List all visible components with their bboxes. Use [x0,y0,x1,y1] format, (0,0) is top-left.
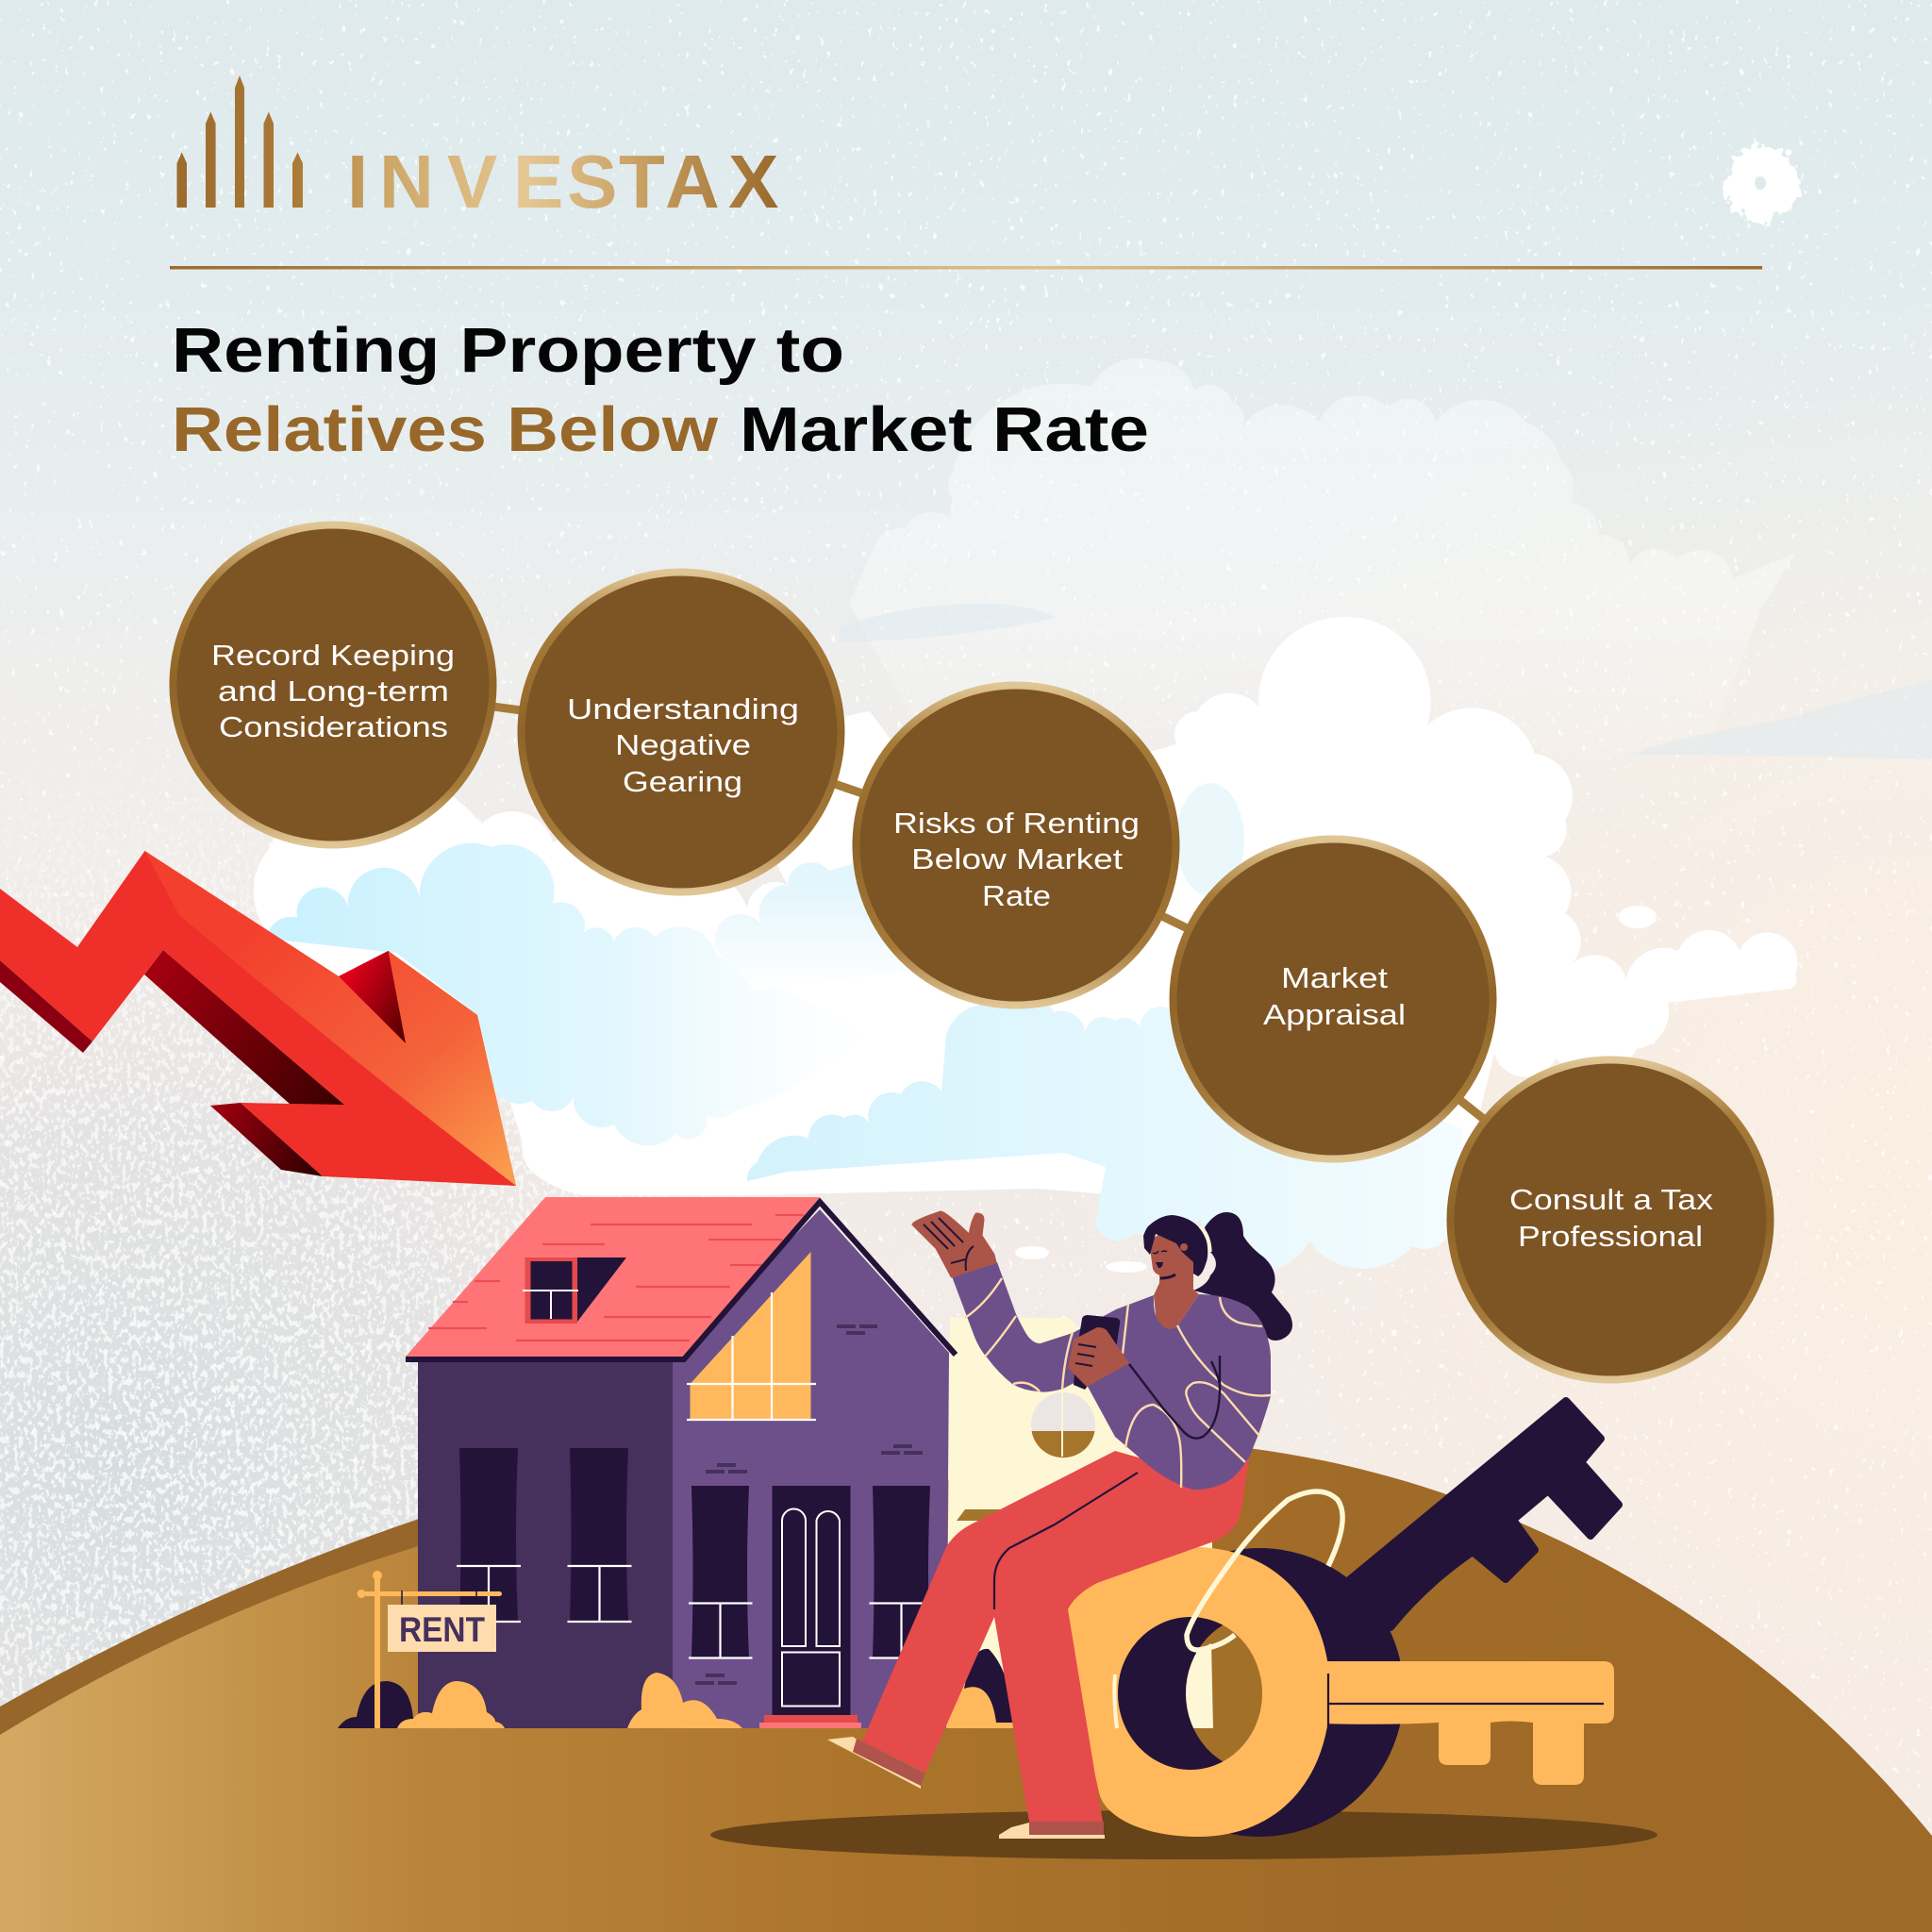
back foot [827,1737,925,1789]
left wall [418,1360,674,1728]
left wall windows [457,1448,632,1622]
roof shingle lines [428,1215,804,1341]
phone [1074,1315,1120,1390]
rent sign: RENT [399,1610,485,1649]
dormer [523,1257,626,1324]
bushes [338,1673,742,1728]
small white cloud puffs [1015,906,1657,1273]
pale background clouds [849,358,1795,774]
downward red arrow [0,851,516,1186]
logo: investax: INVESTAX [347,140,778,224]
sweater pattern lines [965,1278,1271,1488]
panel: Market Appraisal: Market [1281,961,1388,994]
gable window [687,1252,816,1420]
cream back building [946,1318,1212,1728]
neck and chest [1154,1264,1199,1330]
panel: Understanding Negative Gearing: Understanding [567,692,799,725]
roof [406,1197,820,1357]
panel: Understanding Negative Gearing: Gearing [623,765,742,798]
panel: Record Keeping: Record Keeping [211,639,455,672]
title: Renting Property to [172,315,844,386]
title [172,315,1149,465]
house [406,1197,956,1728]
arm line [1129,1356,1220,1439]
eaves and gable trim [406,1202,956,1359]
panel: Record Keeping: and Long-term [218,675,449,708]
title: Market Rate [740,394,1149,465]
panel: Record Keeping [174,525,492,845]
trouser seam [994,1473,1138,1609]
woman sitting on key [827,1212,1292,1839]
title: Relatives Below [172,394,719,465]
bricks [695,1324,923,1685]
logo mark [177,75,303,208]
panel: Risks of Renting Below Market Rate: Rate [982,879,1051,912]
white clouds [254,617,1798,1223]
front foot [999,1822,1105,1839]
head [1143,1215,1210,1278]
panel: Understanding Negative Gearing [521,572,841,892]
connectors between circles [333,685,1610,1220]
blue cloud right [747,993,1463,1272]
panel: Risks of Renting Below Market Rate: Below Market [911,842,1123,875]
panel: Record Keeping: Considerations [219,710,448,743]
panel: Consult a Tax Professional [1451,1060,1770,1379]
door [759,1486,861,1728]
dark key [1115,1401,1619,1837]
panel: Risks of Renting Below Market Rate: Risks of Renting [893,807,1140,840]
right gable wall [673,1209,949,1728]
panel: Understanding Negative Gearing: Negative [615,728,751,761]
panel: Market Appraisal: Appraisal [1263,998,1406,1031]
key ring string [1187,1491,1342,1650]
raised hand [913,1212,995,1276]
raised arm sleeve [952,1262,1085,1392]
torso [1073,1294,1271,1490]
gold key [1057,1547,1614,1837]
blue cloud left [267,843,870,1145]
blue cloud mid upper [714,783,1244,991]
rent sign [357,1571,502,1728]
right wall windows [689,1486,934,1658]
key shadow [710,1810,1657,1859]
ponytail [1193,1212,1292,1341]
panel: Risks of Renting Below Market Rate [857,685,1175,1006]
trousers [862,1451,1250,1822]
logo: investax [177,75,778,224]
pale blue wisps [840,604,1932,759]
panel: Consult a Tax Professional: Professional [1518,1220,1703,1253]
panel: Market Appraisal [1174,840,1492,1158]
hill [0,1446,1932,1932]
header rule [170,266,1762,270]
panel: Consult a Tax Professional: Consult a Tax [1509,1183,1714,1216]
phone hand [1068,1327,1129,1387]
